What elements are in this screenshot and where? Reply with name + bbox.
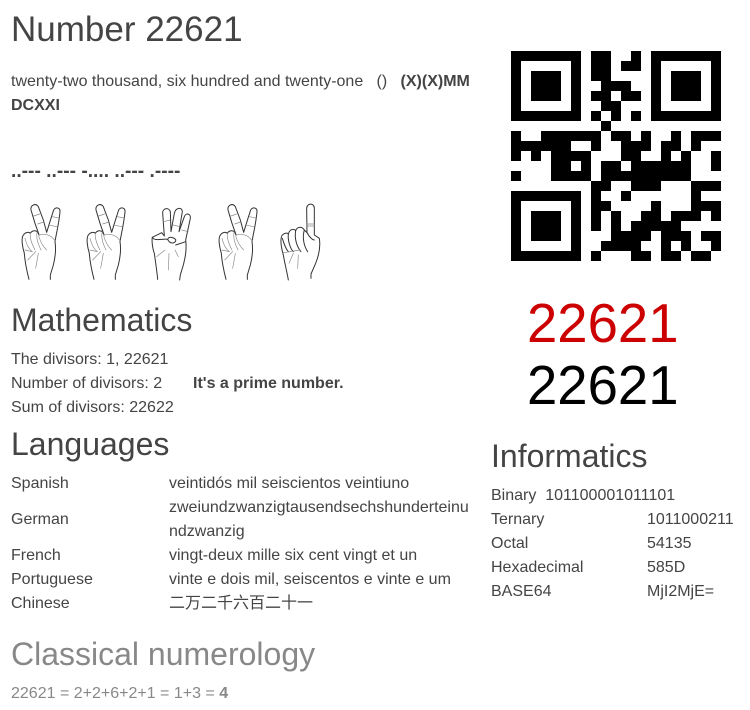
divisors: Number of divisors: 2	[11, 375, 162, 392]
languages table: vingt-deux mille six cent vingt et un	[169, 547, 417, 564]
number in red: 22621	[527, 293, 679, 354]
informatics table: Ternary	[491, 511, 544, 528]
hand: 1	[281, 204, 320, 280]
title: Number 22621	[11, 10, 243, 49]
prime note: It's a prime number.	[193, 375, 344, 392]
divisors: The divisors: 1, 22621	[11, 351, 168, 368]
number in black: 22621	[527, 355, 679, 416]
languages table	[11, 475, 469, 612]
heading: Languages: Languages	[11, 426, 169, 462]
informatics table: 585D	[647, 559, 685, 576]
number in words and Roman numeral	[11, 73, 470, 114]
languages table: zweiundzwanzigtausendsechshunderteinu	[169, 499, 469, 516]
informatics table: Hexadecimal	[491, 559, 583, 576]
informatics table	[491, 487, 734, 600]
languages table: Portuguese	[11, 571, 93, 588]
hand: 2	[22, 205, 60, 279]
divisors	[11, 351, 174, 416]
informatics table: Binary 101100001011101	[491, 487, 675, 504]
number in words and Roman numeral: twenty-two thousand, six hundred and twenty-one () (X)(X)MM	[11, 73, 470, 90]
languages table: Chinese	[11, 595, 70, 612]
sign language hands	[22, 204, 320, 280]
informatics table: 54135	[647, 535, 692, 552]
informatics table: Octal	[491, 535, 528, 552]
hand: 3 fingers	[152, 208, 190, 280]
informatics table: MjI2MjE=	[647, 583, 714, 600]
morse code: ..--- ..--- -.... ..--- .----	[11, 161, 180, 182]
languages table: vinte e dois mil, seiscentos e vinte e um	[169, 571, 451, 588]
languages table: 二万二千六百二十一	[169, 595, 313, 612]
informatics table: 1011000211	[647, 511, 734, 528]
languages table: ndzwanzig	[169, 523, 245, 540]
divisors: Sum of divisors: 22622	[11, 399, 174, 416]
informatics table: BASE64	[491, 583, 551, 600]
languages table: German	[11, 511, 69, 528]
heading: Informatics: Informatics	[491, 438, 647, 474]
number in words and Roman numeral: DCXXI	[11, 97, 60, 114]
hand: 2	[219, 205, 257, 279]
heading: Mathematics: Mathematics	[11, 302, 192, 338]
numerology sum: 22621 = 2+2+6+2+1 = 1+3 = 4	[11, 685, 228, 702]
languages table: French	[11, 547, 61, 564]
QR code	[511, 51, 721, 261]
heading: Classical numerology: Classical numerology	[11, 636, 315, 672]
languages table: Spanish	[11, 475, 69, 492]
hand: 2	[87, 205, 125, 279]
languages table: veintidós mil seiscientos veintiuno	[169, 475, 409, 492]
